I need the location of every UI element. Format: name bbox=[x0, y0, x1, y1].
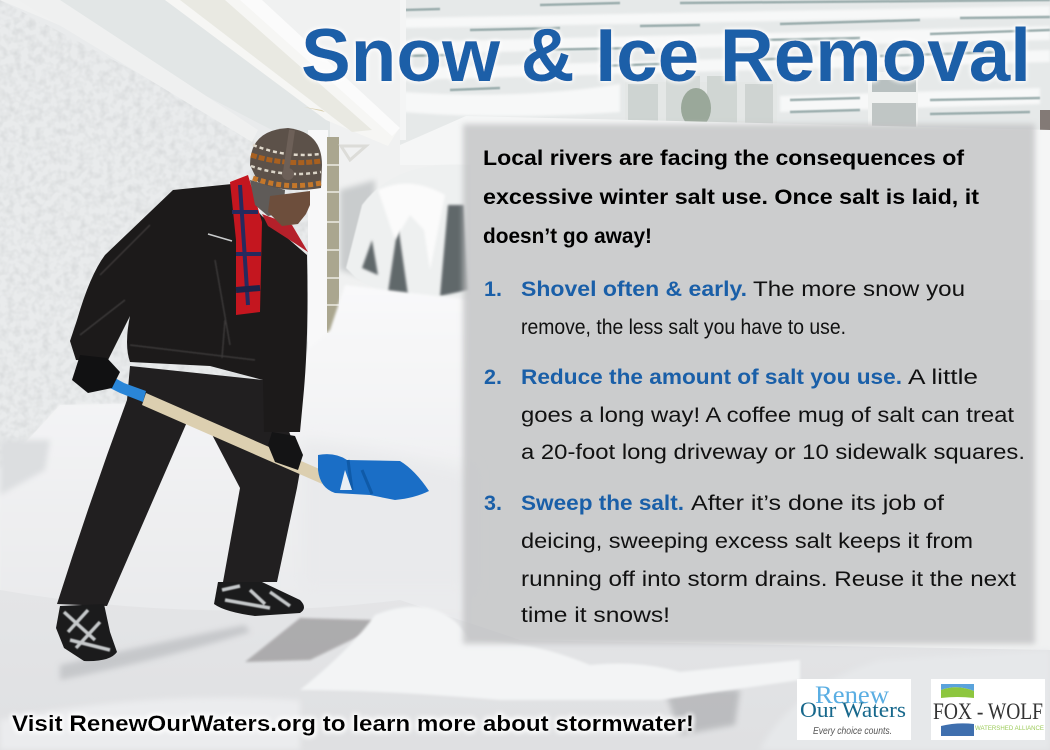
shovel bbox=[100, 373, 429, 500]
tip 2: reduce the amount of salt: Reduce the amount of salt you use. bbox=[521, 365, 902, 389]
tip 3: sweep the salt: time it snows! bbox=[521, 603, 670, 627]
gloves bbox=[72, 355, 303, 470]
corner trim post bbox=[308, 130, 366, 365]
logo: Fox-Wolf Watershed Alliance bbox=[931, 679, 1045, 740]
roof eave bbox=[165, 0, 400, 146]
legs and trousers bbox=[57, 366, 300, 606]
tip 1: shovel often and early: The more snow you bbox=[753, 277, 965, 301]
snow bank in front of house bbox=[400, 116, 1050, 300]
tip 2: reduce the amount of salt bbox=[484, 365, 1025, 464]
tip 3: sweep the salt: deicing, sweeping excess salt keeps it from bbox=[521, 529, 973, 553]
intro text: doesn’t go away! bbox=[483, 224, 652, 248]
garage wall bbox=[0, 0, 330, 470]
jacket bbox=[70, 184, 308, 432]
tip 2: reduce the amount of salt: 2. bbox=[484, 365, 502, 389]
tip 1: shovel often and early bbox=[484, 277, 965, 339]
intro text: Local rivers are facing the consequences of bbox=[483, 146, 965, 170]
tip 2: reduce the amount of salt: A little bbox=[908, 365, 978, 389]
tip 2: reduce the amount of salt: a 20-foot long driveway or 10 sidewalk squares. bbox=[521, 440, 1025, 464]
man shovelling snow bbox=[56, 128, 429, 661]
jacket logo bbox=[208, 234, 232, 241]
head and neck bbox=[250, 180, 310, 226]
knit hat bbox=[250, 128, 322, 190]
logo: Fox-Wolf Watershed Alliance: WATERSHED ALLIANCE bbox=[975, 725, 1045, 732]
title: Snow & Ice Removal bbox=[301, 13, 1031, 97]
footer call to action: Visit RenewOurWaters.org to learn more about stormwater! bbox=[12, 711, 694, 736]
tip 3: sweep the salt: running off into storm drains. Reuse it the next bbox=[521, 567, 1016, 591]
logo: Renew Our Waters: Every choice counts. bbox=[813, 726, 892, 737]
intro text: excessive winter salt use. Once salt is laid, it bbox=[483, 185, 979, 209]
right shoe bbox=[214, 582, 304, 616]
left shoe bbox=[56, 604, 117, 661]
shovelled ground bbox=[0, 590, 1050, 750]
tip 3: sweep the salt: After it’s done its job of bbox=[691, 491, 944, 515]
tip 1: shovel often and early: remove, the less salt you have to use. bbox=[521, 315, 846, 339]
tip 3: sweep the salt: Sweep the salt. bbox=[521, 491, 684, 515]
snow drifts bbox=[0, 285, 470, 640]
intro text bbox=[483, 146, 979, 248]
tip 3: sweep the salt bbox=[484, 491, 1016, 627]
tip 3: sweep the salt: 3. bbox=[484, 491, 502, 515]
tip 1: shovel often and early: 1. bbox=[484, 277, 502, 301]
tip 2: reduce the amount of salt: goes a long way! A coffee mug of salt can treat bbox=[521, 403, 1014, 427]
logo: Renew Our Waters: Renew bbox=[815, 682, 889, 709]
snow-covered tree bbox=[338, 164, 470, 302]
neighbouring house siding bbox=[400, 0, 1050, 172]
logo: Renew Our Waters: Our Waters bbox=[800, 697, 906, 722]
logo: Renew Our Waters bbox=[797, 679, 911, 740]
tip 1: shovel often and early: Shovel often & early. bbox=[521, 277, 747, 301]
translucent text panel bbox=[463, 124, 1035, 644]
scarf bbox=[230, 175, 308, 315]
